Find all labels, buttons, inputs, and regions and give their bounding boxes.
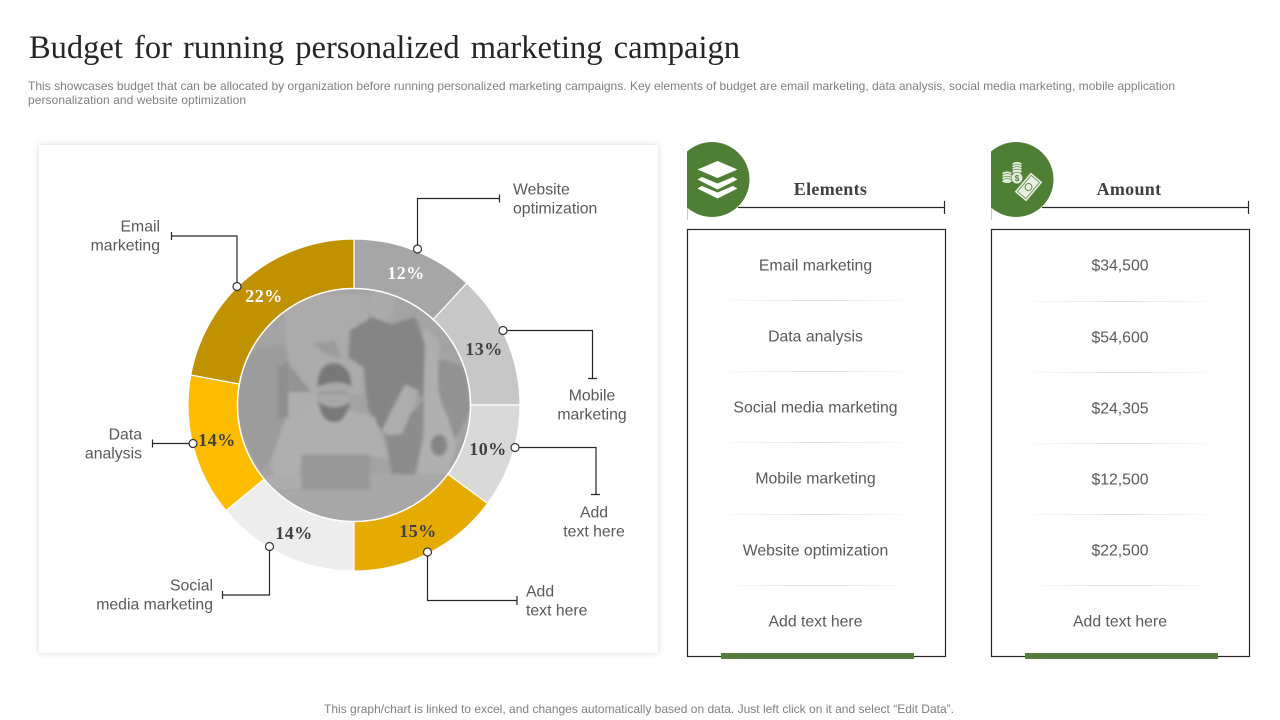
segment: social media marketing 14% [226, 479, 354, 571]
leader: email marketing [91, 218, 241, 290]
percentage labels: 10% [469, 439, 507, 459]
leader: email marketing: Email [120, 218, 160, 236]
leader: add text 10% [511, 444, 625, 540]
elements heading: Elements [794, 179, 867, 199]
center photo: team at a laptop [235, 288, 475, 527]
title: Budget for running personalized marketing campaign [29, 30, 740, 66]
donut chart [188, 239, 520, 571]
intro text: personalization and website optimization [28, 93, 246, 107]
amount rows: $22,500 [1091, 542, 1149, 560]
leader: data analysis: analysis [85, 446, 142, 462]
elements rows: Website optimization [743, 542, 888, 560]
elements rows: Data analysis [768, 328, 863, 346]
percentage labels: 22% [245, 286, 283, 306]
elements rows: Email marketing [759, 258, 872, 274]
leader: data analysis: Data [109, 426, 142, 444]
leader: add text 15%: text here [526, 602, 588, 620]
amount rows: $34,500 [1091, 258, 1149, 274]
segment: add text 15% [354, 474, 488, 571]
amount header rule [1042, 201, 1248, 214]
elements rows: Social media marketing [733, 400, 898, 416]
panel: donut chart [39, 145, 658, 653]
elements green bar [721, 653, 914, 659]
leader: add text 10%: text here [563, 524, 625, 540]
elements box [688, 230, 946, 656]
percentage labels: 12% [387, 263, 425, 283]
leader: add text 10%: Add [580, 504, 608, 522]
intro text: This showcases budget that can be allocated by organization before running personalized marketing campaigns. Key elements of budget are email marketing, data analysis, social media marketing, mobile application [28, 79, 1175, 93]
percentage labels: 13% [465, 339, 503, 359]
amount heading: Amount [1097, 179, 1161, 199]
elements header rule [738, 201, 944, 214]
leader: add text 15%: Add [526, 584, 554, 600]
leader: email marketing: marketing [91, 238, 160, 254]
icon: coins and banknote: $ [1015, 174, 1020, 183]
segment: website optimization 12% [354, 239, 467, 320]
icon: coins and banknote [991, 142, 1054, 220]
footer note: This graph/chart is linked to excel, and changes automatically based on data. Just left click on it and select “Edit Data”. [324, 702, 954, 716]
chart card [39, 145, 658, 653]
percentage labels: 15% [399, 521, 437, 541]
amount rows [1073, 258, 1167, 630]
percentage labels: 14% [275, 523, 313, 543]
leader: social media marketing: Social [170, 578, 213, 594]
dividers [1016, 301, 1226, 586]
dividers [712, 300, 922, 586]
leader: website optimization [414, 182, 597, 253]
intro text [28, 79, 1175, 107]
segment: add text 10% [448, 405, 520, 504]
amount rows: $54,600 [1091, 330, 1149, 346]
leader: social media marketing: media marketing [96, 596, 213, 614]
leader: mobile marketing [499, 326, 627, 424]
leader: website optimization: optimization [513, 200, 597, 218]
elements rows: Mobile marketing [755, 470, 876, 488]
panel: amount table [978, 142, 1250, 659]
panel: elements table [674, 142, 946, 659]
elements rows: Add text here [769, 614, 863, 630]
leader: mobile marketing: Mobile [569, 388, 615, 404]
segment: mobile marketing 13% [433, 283, 520, 405]
amount box [992, 230, 1250, 656]
leader: add text 15% [424, 548, 588, 620]
percentage labels: 14% [198, 430, 236, 450]
segment: data analysis 14% [188, 375, 264, 511]
amount green bar [1025, 653, 1218, 659]
circle outline [238, 288, 470, 522]
percentage labels [198, 263, 507, 543]
icon: stacked layers [687, 142, 750, 220]
amount rows: $12,500 [1091, 472, 1149, 488]
leader: mobile marketing: marketing [557, 406, 627, 424]
leader: social media marketing [96, 542, 274, 614]
segment: email marketing 22% [191, 239, 354, 384]
amount rows: $24,305 [1091, 400, 1149, 418]
amount rows: Add text here [1073, 614, 1167, 630]
leader: data analysis [85, 426, 197, 462]
leader: website optimization: Website [513, 182, 570, 198]
elements rows [733, 258, 898, 630]
